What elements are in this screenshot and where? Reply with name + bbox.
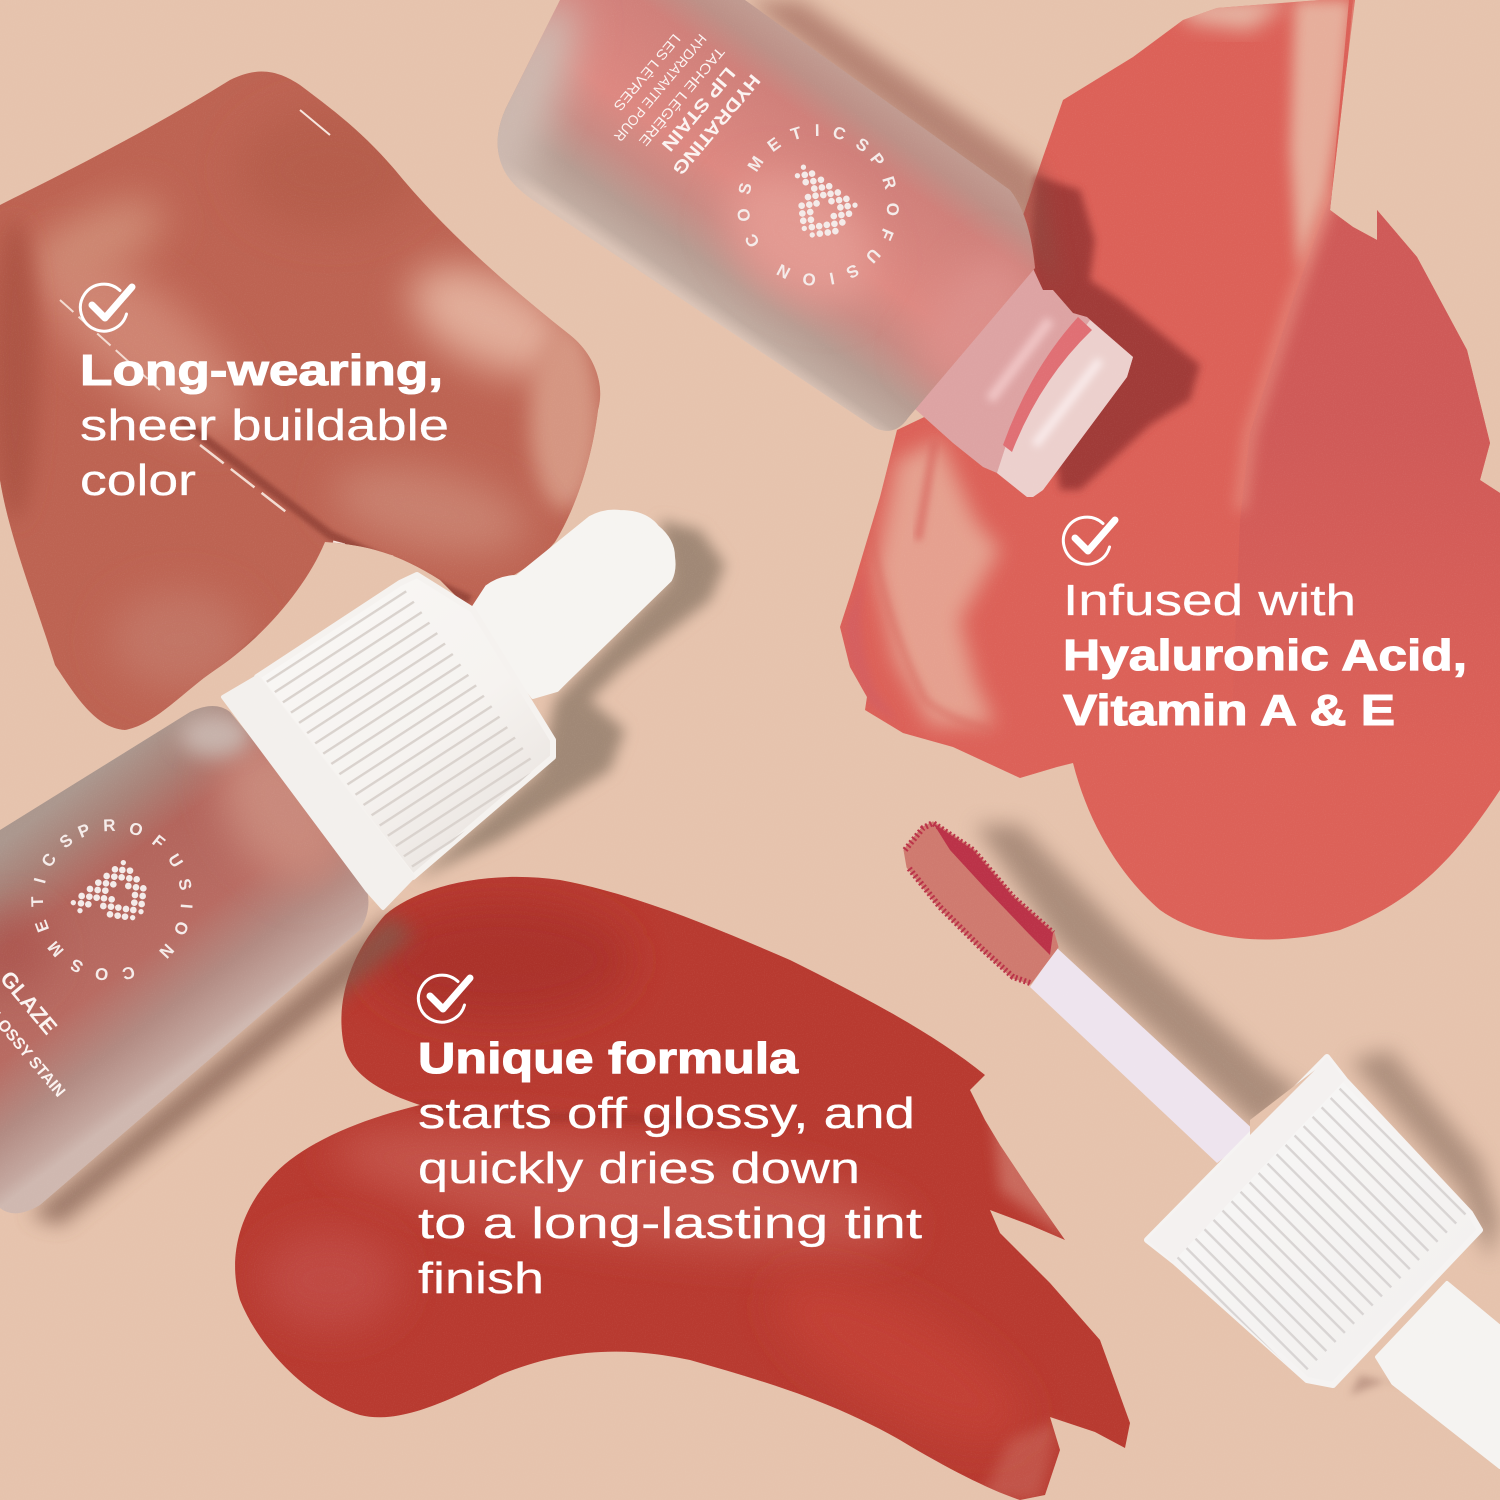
callout: long-wearing	[80, 284, 449, 505]
swatch: rose-brown top left	[0, 72, 600, 730]
bottle body	[0, 706, 385, 1213]
dropper cap	[223, 575, 553, 908]
text block: to a long-lasting tint	[418, 1199, 922, 1248]
text block: Long-wearing,	[80, 346, 443, 395]
bottle label text: LIP STAIN	[658, 63, 739, 155]
text block	[418, 1034, 922, 1303]
neck shadow on swatch	[1030, 175, 1200, 490]
wand stem	[1030, 948, 1257, 1163]
callout: infused with	[1063, 517, 1467, 735]
text block	[80, 346, 449, 505]
bottle neck	[905, 262, 1133, 497]
dropper end	[1377, 1283, 1500, 1467]
screw cap	[1147, 1057, 1480, 1385]
dropper bulb	[470, 512, 674, 697]
text block: sheer buildable	[80, 401, 449, 450]
icon: check	[1063, 517, 1115, 564]
text block: color	[80, 456, 196, 505]
right lobe	[1239, 194, 1500, 548]
text block: Vitamin A & E	[1063, 686, 1395, 735]
bottle label text: LES LÈVRES	[611, 31, 684, 114]
swatch: red bottom	[235, 877, 1130, 1500]
text block: starts off glossy, and	[418, 1089, 915, 1138]
dry-brush fade at top	[1290, 0, 1352, 270]
pale brushed patch lower-left	[875, 440, 1000, 725]
swatch: coral top right	[840, 0, 1500, 940]
text block	[1063, 576, 1467, 735]
bottle label text: HYDRATING	[669, 70, 764, 179]
text block: finish	[418, 1254, 544, 1303]
text block: Unique formula	[418, 1034, 799, 1083]
callout: unique formula	[418, 975, 922, 1303]
logo: ring text and dotted mark: PROFUSION COSMETICS	[31, 819, 193, 980]
product: lip applicator wand and cap	[905, 823, 1500, 1467]
product: hydrating lip stain bottle	[498, 0, 1133, 497]
bottle body	[498, 0, 1035, 431]
bottle label text	[611, 31, 764, 179]
bottle label text: HYDRATANTE POUR	[611, 31, 710, 145]
text block: quickly dries down	[418, 1144, 860, 1193]
applicator tip	[905, 823, 1057, 983]
product: glaze glossy stain bottle with dropper	[0, 510, 676, 1214]
bottle label text: TACHE LÉGÈRE	[636, 44, 728, 149]
logo: ring text and dotted mark: PROFUSION COSMETICS	[738, 124, 899, 286]
text block: Hyaluronic Acid,	[1063, 631, 1467, 680]
icon: check	[418, 975, 470, 1022]
text block: Infused with	[1063, 576, 1356, 625]
icon: check	[80, 284, 132, 331]
